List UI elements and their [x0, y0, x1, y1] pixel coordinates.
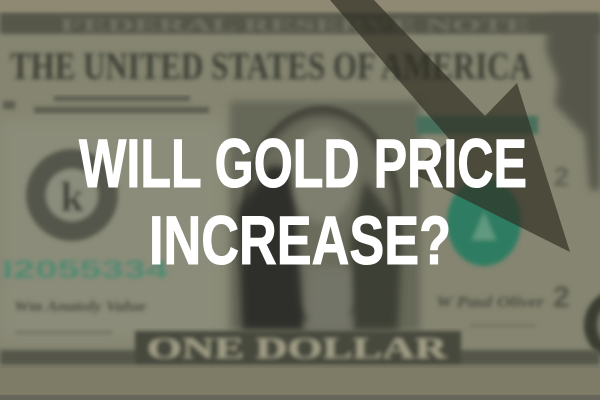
bill signature right and numerals: W Paul Oliver — [436, 294, 545, 311]
bill lower band: One Dollar: ONE DOLLAR — [147, 332, 448, 365]
bill right ornament — [546, 16, 600, 361]
bill top border band: FEDERAL RESERVE NOTE — [60, 15, 530, 35]
headline — [79, 125, 527, 279]
bill left seal: k — [60, 175, 84, 221]
headline: INCREASE? — [149, 202, 451, 279]
arrow: falling trend — [330, 0, 570, 252]
bill portrait: oval frame with Washington — [230, 101, 420, 332]
bill signature left — [14, 299, 146, 334]
bill serial number: I2055334 — [2, 256, 168, 284]
bill left seal — [26, 149, 118, 241]
bill signature right and numerals: 2 — [553, 281, 570, 314]
bill small text under heading — [3, 96, 209, 113]
bill green treasury seal — [416, 116, 538, 266]
bill signature left: Wm Anatoly Value — [14, 299, 146, 315]
bill lower band: One Dollar — [0, 331, 600, 365]
bill top border band — [0, 13, 600, 35]
bill signature right and numerals: 2 — [554, 162, 569, 192]
bill signature right and numerals — [436, 162, 570, 327]
